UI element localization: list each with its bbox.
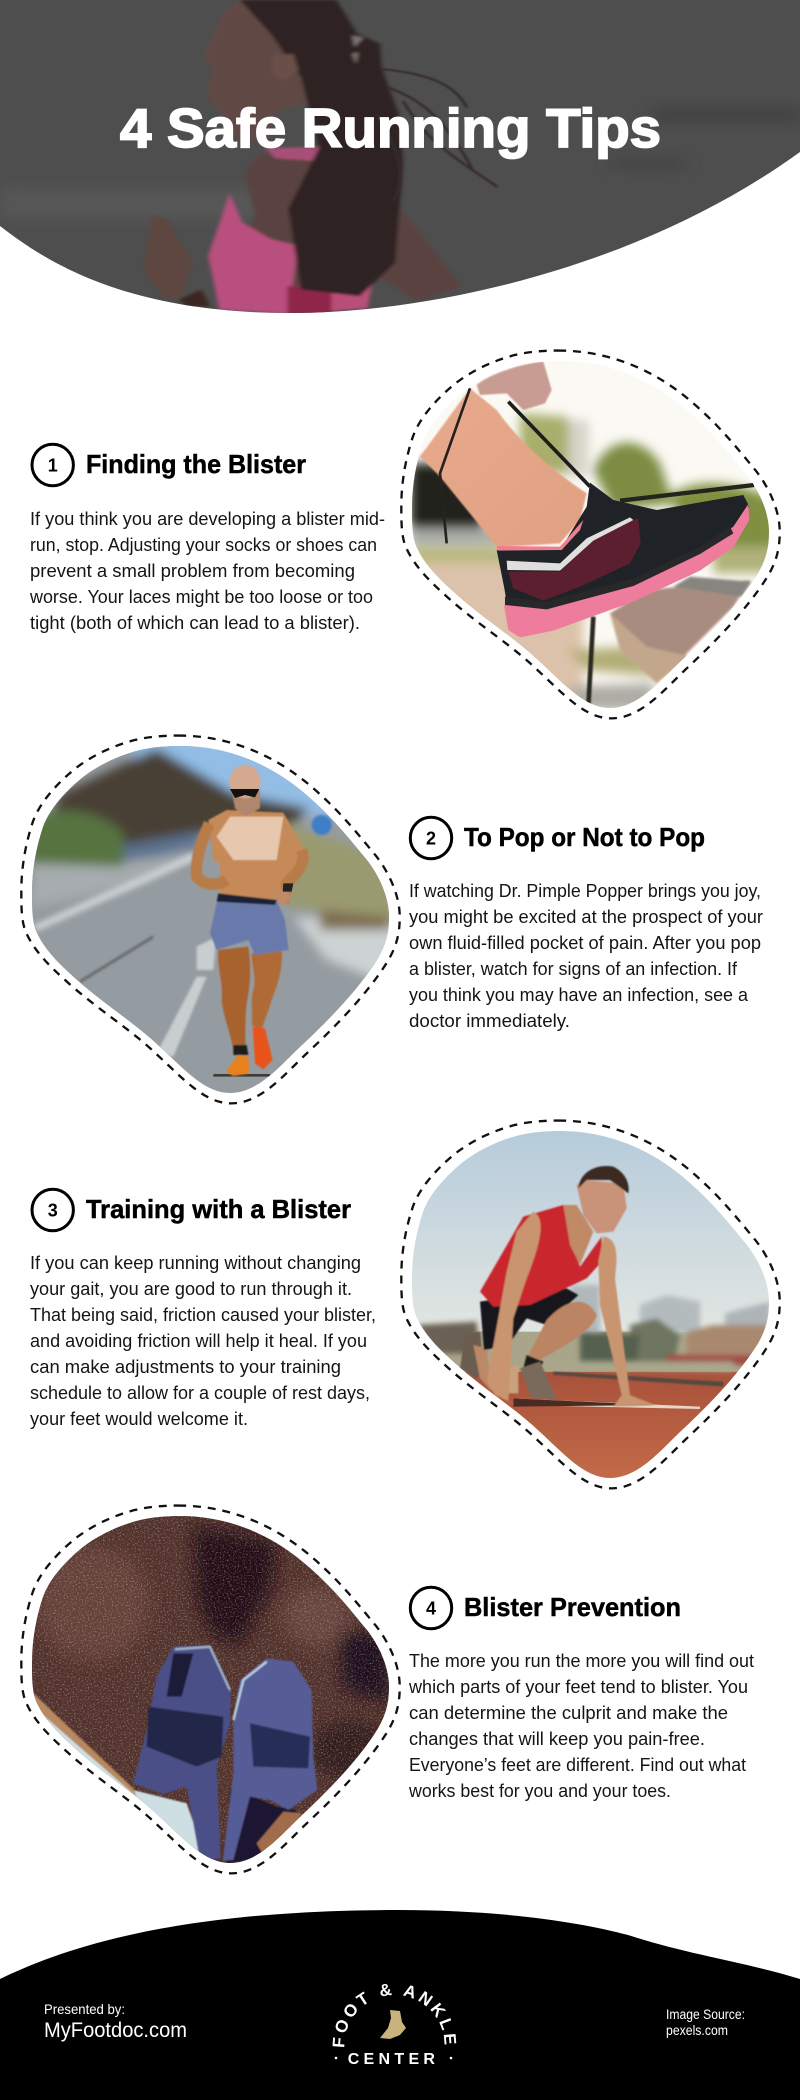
number badge 4: [410, 1587, 452, 1629]
body text 4: which parts of your feet tend to blister. You: [408, 1677, 748, 1697]
dashed outline 4: [21, 1506, 400, 1873]
photo blob: runner on road: [20, 734, 401, 1104]
body text 3: your gait, you are good to run through it.: [30, 1279, 352, 1299]
body text 2: you think you may have an infection, see a: [409, 985, 749, 1005]
section 2: to pop or not to pop: [0, 720, 763, 1120]
footer: logo Foot & Ankle Center: [332, 1984, 456, 2068]
footer: presented by: Presented by:: [44, 2001, 125, 2017]
body text 3: and avoiding friction will help it heal. If you: [30, 1331, 367, 1351]
body text 2: own fluid-filled pocket of pain. After you pop: [409, 933, 761, 953]
heading 1: Finding the Blister: [86, 449, 306, 479]
body text 1: If you think you are developing a blister mid-: [30, 509, 385, 529]
number badge 2: [410, 817, 452, 859]
footer: image source: [666, 2007, 745, 2038]
body text 1: prevent a small problem from becoming: [30, 561, 355, 581]
body text 4: [408, 1651, 754, 1801]
section 4: blister prevention: [0, 1490, 754, 1890]
body text 4: Everyone’s feet are different. Find out what: [409, 1755, 746, 1775]
footer: logo Foot & Ankle Center: CENTER: [348, 2051, 439, 2068]
dashed outline 1: [401, 351, 780, 718]
body text 3: [30, 1253, 376, 1429]
header photo: woman running: [0, 0, 800, 330]
heading 4: Blister Prevention: [464, 1592, 681, 1622]
body text 3: can make adjustments to your training: [30, 1357, 341, 1377]
footer band: [0, 1910, 800, 2100]
footer: logo Foot & Ankle Center: FOOT & ANKLE: [332, 1984, 456, 2047]
body text 3: If you can keep running without changing: [30, 1253, 361, 1273]
body text 1: tight (both of which can lead to a blister).: [30, 613, 360, 633]
heading 2: To Pop or Not to Pop: [464, 822, 705, 852]
body text 2: you might be excited at the prospect of your: [409, 907, 763, 927]
dashed outline 2: [21, 736, 400, 1103]
body text 2: doctor immediately.: [409, 1011, 570, 1031]
photo blob: tying shoelace: [400, 349, 781, 720]
body text 1: [29, 509, 385, 633]
body text 3: That being said, friction caused your blister,: [30, 1305, 376, 1325]
shoulder and arm: [143, 0, 462, 314]
body text 4: changes that will keep you pain-free.: [409, 1729, 705, 1749]
footer: presented by: [44, 2001, 187, 2042]
number badge 1: [32, 444, 73, 486]
footer: image source: pexels.com: [666, 2023, 728, 2038]
photo blob: shoes on dirt: [20, 1504, 401, 1874]
section 3: training with a blister: [30, 1105, 800, 1505]
body text 2: If watching Dr. Pimple Popper brings you joy,: [409, 881, 761, 901]
photo blob: sprinter at start: [400, 1119, 781, 1490]
body text 1: run, stop. Adjusting your socks or shoes can: [30, 535, 377, 555]
body text 4: The more you run the more you will find out: [409, 1651, 754, 1671]
footer: presented by: MyFootdoc.com: [44, 2019, 187, 2042]
number badge 4: 4: [426, 1598, 436, 1618]
dashed outline 3: [401, 1121, 780, 1488]
title: 4 Safe Running Tips: [120, 97, 661, 159]
body text 3: your feet would welcome it.: [30, 1409, 248, 1429]
heading 3: Training with a Blister: [86, 1194, 351, 1224]
body text 2: [409, 881, 763, 1031]
body text 3: schedule to allow for a couple of rest days,: [30, 1383, 370, 1403]
number badge 1: 1: [48, 456, 58, 476]
number badge 3: [32, 1189, 73, 1231]
number badge 2: 2: [426, 828, 436, 848]
body text 4: can determine the culprit and make the: [409, 1703, 728, 1723]
number badge 3: 3: [48, 1200, 58, 1220]
body text 2: a blister, watch for signs of an infection. If: [409, 959, 738, 979]
body text 1: worse. Your laces might be too loose or too: [29, 587, 373, 607]
footer: image source: Image Source:: [666, 2007, 745, 2022]
section 1: finding the blister: [29, 330, 800, 730]
body text 4: works best for you and your toes.: [408, 1781, 671, 1801]
icon: foot: [380, 2010, 406, 2039]
